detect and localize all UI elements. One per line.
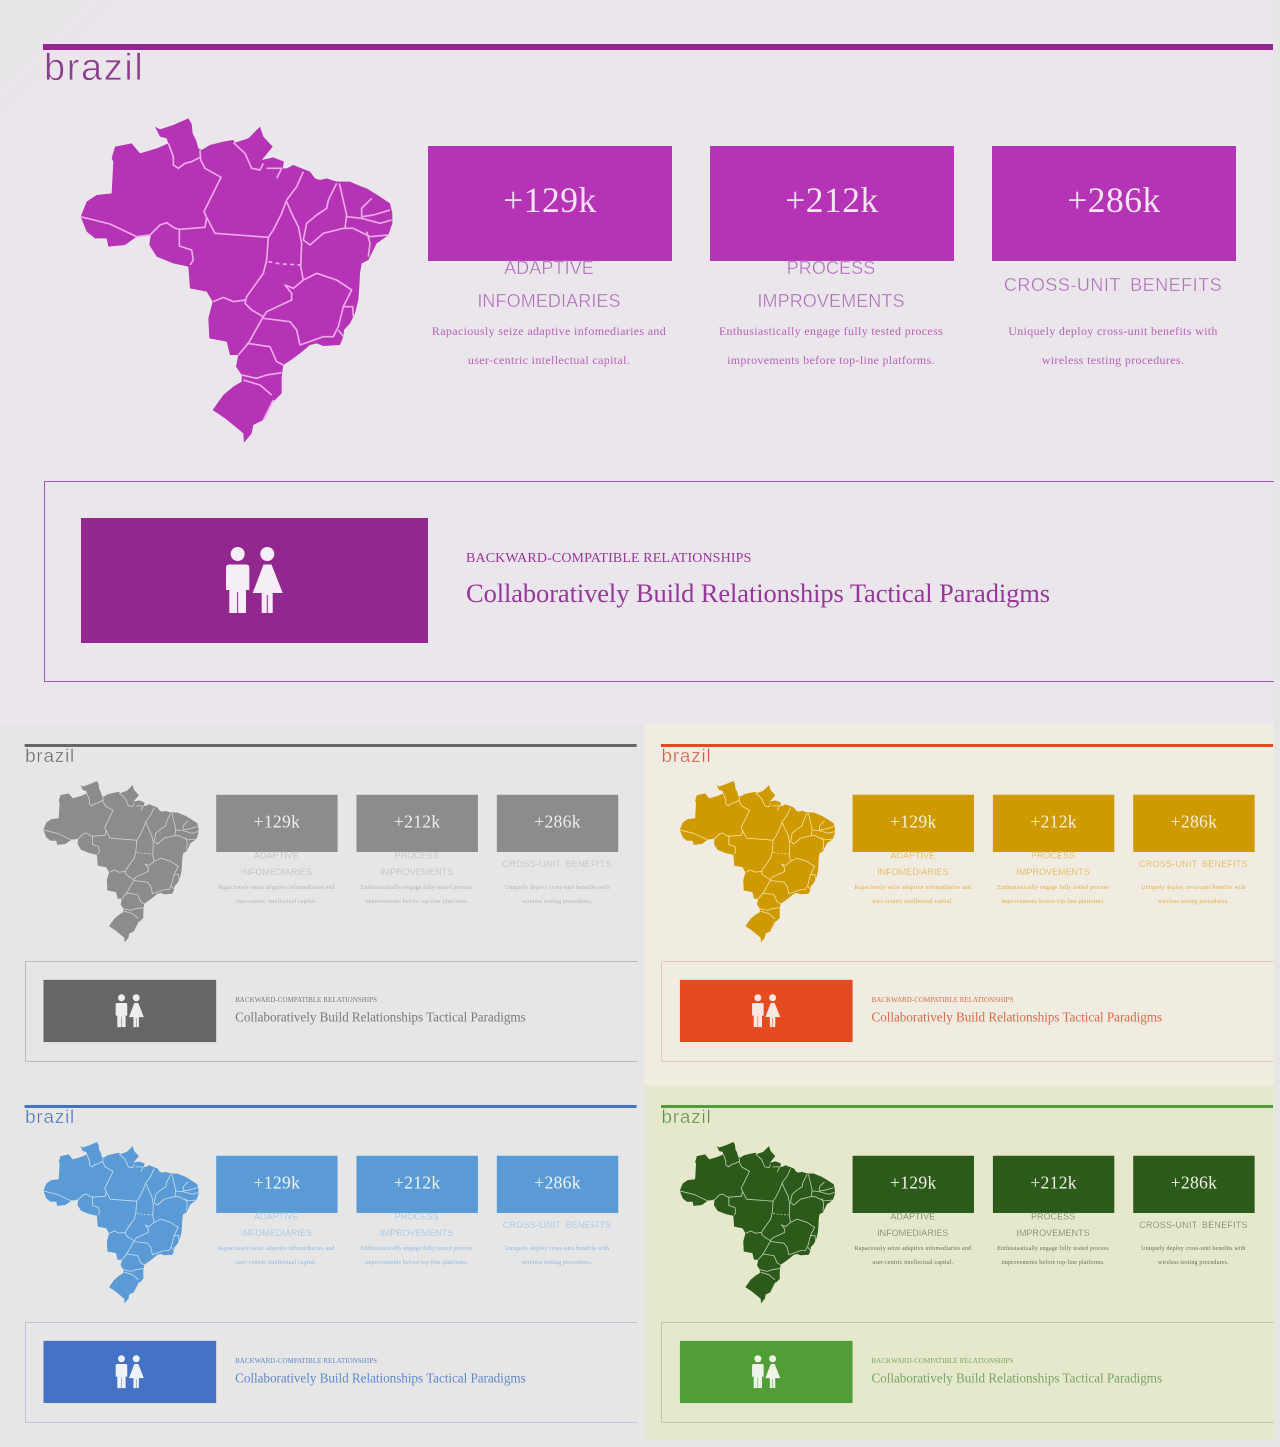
callout headline: Collaboratively Build Relationships Tactical Paradigms	[871, 1371, 1162, 1386]
stat box 2: +212k	[785, 180, 879, 220]
callout frame	[661, 961, 1274, 1061]
panel: orange slide	[661, 744, 1274, 1062]
caption 1: user-centric intellectual capital.	[236, 1259, 317, 1266]
stat box 1: +129k	[254, 1173, 300, 1193]
caption 3: Uniquely deploy cross-unit benefits with	[505, 883, 609, 890]
caption 3: Uniquely deploy cross-unit benefits with	[1141, 883, 1246, 890]
caption 2: PROCESS	[395, 1211, 439, 1221]
icon: man and woman	[752, 994, 780, 1028]
panel: grey slide	[24, 744, 638, 1062]
header bar	[43, 44, 1273, 50]
caption 1: INFOMEDIARIES	[241, 867, 312, 877]
caption 2	[997, 850, 1109, 905]
stat box 1: +129k	[890, 812, 937, 832]
stat box 3	[992, 146, 1236, 261]
stat box 2: +212k	[1030, 1173, 1077, 1193]
callout kicker: BACKWARD-COMPATIBLE RELATIONSHIPS	[871, 1357, 1014, 1365]
stat box 1	[216, 1156, 338, 1213]
caption 2: Enthusiastically engage fully tested process	[997, 1244, 1109, 1251]
map of Brazil	[680, 1142, 835, 1304]
callout colour band	[680, 1341, 853, 1403]
background: main slide	[0, 0, 1274, 725]
background: orange slide	[644, 724, 1274, 1086]
stat box 2: +212k	[394, 1173, 440, 1193]
stat box 3: +286k	[534, 812, 581, 832]
caption 2: Enthusiastically engage fully tested process	[997, 883, 1109, 890]
caption 1: ADAPTIVE	[504, 258, 594, 278]
callout colour band	[44, 980, 216, 1042]
title: brazil	[25, 1106, 75, 1127]
panel: blue slide	[24, 1105, 638, 1422]
stat box 1	[428, 146, 672, 261]
caption 1	[218, 850, 335, 905]
map of Brazil	[43, 1142, 198, 1304]
caption 2: improvements before top-line platforms.	[365, 898, 468, 905]
caption 2: improvements before top-line platforms.	[1001, 1259, 1105, 1266]
caption 2: IMPROVEMENTS	[1016, 867, 1090, 877]
caption 2: improvements before top-line platforms.	[365, 1259, 468, 1266]
stat box 3	[1133, 795, 1255, 852]
caption 3	[503, 1220, 611, 1266]
caption 3: CROSS-UNIT BENEFITS	[503, 859, 611, 869]
stat box 2	[356, 1156, 478, 1213]
caption 3	[1004, 274, 1222, 367]
caption 3: wireless testing procedures.	[522, 898, 592, 905]
stat box 2	[993, 1156, 1114, 1213]
stat box 2	[993, 795, 1114, 852]
caption 2	[719, 258, 943, 367]
caption 1: user-centric intellectual capital.	[468, 353, 630, 367]
caption 3: Uniquely deploy cross-unit benefits with	[1141, 1244, 1246, 1251]
stat box 1: +129k	[890, 1173, 937, 1193]
title: brazil	[25, 745, 75, 766]
stat box 3: +286k	[1067, 180, 1161, 220]
caption 3: Uniquely deploy cross-unit benefits with	[1008, 324, 1218, 338]
caption 3: wireless testing procedures.	[522, 1259, 592, 1266]
panel: green slide	[661, 1105, 1274, 1422]
caption 3: wireless testing procedures.	[1158, 898, 1229, 905]
caption 2: PROCESS	[1031, 850, 1075, 860]
stat box 2: +212k	[394, 812, 440, 832]
icon: man and woman	[116, 994, 144, 1028]
callout frame	[25, 961, 637, 1061]
caption 1: Rapaciously seize adaptive infomediaries and	[218, 883, 335, 890]
stat box 3: +286k	[1171, 1173, 1217, 1193]
caption 1	[218, 1211, 335, 1266]
caption 3	[1139, 859, 1248, 905]
caption 2: IMPROVEMENTS	[1016, 1228, 1090, 1238]
caption 2: Enthusiastically engage fully tested process	[719, 324, 943, 338]
stat box 2	[710, 146, 954, 261]
caption 1: user-centric intellectual capital.	[236, 898, 317, 905]
caption 2	[361, 850, 472, 905]
caption 1: Rapaciously seize adaptive infomediaries and	[855, 1244, 971, 1251]
stat box 1: +129k	[254, 812, 300, 832]
caption 1: ADAPTIVE	[254, 850, 299, 860]
caption 2: IMPROVEMENTS	[757, 291, 905, 311]
caption 3: wireless testing procedures.	[1158, 1259, 1229, 1266]
map of Brazil	[43, 781, 198, 942]
stat box 2: +212k	[1030, 812, 1077, 832]
header bar	[661, 1105, 1273, 1108]
caption 1: user-centric intellectual capital.	[872, 1259, 953, 1266]
caption 2: Enthusiastically engage fully tested process	[361, 883, 472, 890]
callout kicker: BACKWARD-COMPATIBLE RELATIONSHIPS	[871, 996, 1014, 1004]
caption 3: CROSS-UNIT BENEFITS	[503, 1220, 611, 1230]
caption 1: INFOMEDIARIES	[241, 1228, 312, 1238]
caption 1	[854, 850, 971, 905]
caption 3: Uniquely deploy cross-unit benefits with	[505, 1244, 609, 1251]
stat box 3: +286k	[1171, 812, 1217, 832]
stat box 2	[356, 795, 478, 852]
stat box 1	[216, 795, 338, 852]
callout headline: Collaboratively Build Relationships Tactical Paradigms	[235, 1010, 526, 1025]
title: brazil	[661, 1106, 711, 1127]
stat box 3: +286k	[534, 1173, 581, 1193]
caption 2	[361, 1211, 472, 1266]
caption 1: Rapaciously seize adaptive infomediaries and	[855, 883, 971, 890]
caption 3: CROSS-UNIT BENEFITS	[1139, 1220, 1248, 1230]
icon: man and woman	[116, 1355, 144, 1388]
stat box 3	[497, 1156, 618, 1213]
caption 1: ADAPTIVE	[890, 1211, 935, 1221]
header bar	[25, 1105, 637, 1108]
caption 1: ADAPTIVE	[254, 1211, 299, 1221]
stat box 1	[853, 1156, 974, 1213]
caption 2: PROCESS	[787, 258, 875, 278]
caption 3	[1139, 1220, 1248, 1266]
caption 2: improvements before top-line platforms.	[1001, 898, 1105, 905]
callout headline: Collaboratively Build Relationships Tactical Paradigms	[466, 578, 1050, 608]
icon: man and woman	[226, 547, 283, 613]
caption 1: INFOMEDIARIES	[877, 867, 948, 877]
caption 3: CROSS-UNIT BENEFITS	[1139, 859, 1248, 869]
callout frame	[25, 1322, 637, 1422]
callout colour band	[81, 518, 428, 643]
callout headline: Collaboratively Build Relationships Tactical Paradigms	[235, 1371, 526, 1386]
stat box 3	[497, 795, 618, 852]
caption 1: Rapaciously seize adaptive infomediaries and	[218, 1244, 335, 1251]
caption 2	[997, 1211, 1109, 1266]
caption 2: PROCESS	[1031, 1211, 1075, 1221]
map of Brazil	[680, 781, 835, 942]
callout kicker: BACKWARD-COMPATIBLE RELATIONSHIPS	[235, 996, 377, 1004]
caption 2: PROCESS	[395, 850, 439, 860]
caption 1: INFOMEDIARIES	[477, 291, 621, 311]
header bar	[661, 744, 1273, 747]
callout frame	[661, 1322, 1274, 1422]
background: green slide	[645, 1086, 1274, 1440]
caption 3	[503, 859, 611, 905]
stat box 3	[1133, 1156, 1255, 1213]
caption 3: CROSS-UNIT BENEFITS	[1004, 274, 1222, 294]
callout headline: Collaboratively Build Relationships Tactical Paradigms	[871, 1010, 1162, 1025]
callout colour band	[44, 1341, 216, 1403]
caption 2: Enthusiastically engage fully tested process	[361, 1244, 472, 1251]
caption 3: wireless testing procedures.	[1042, 353, 1184, 367]
callout frame	[44, 481, 1274, 682]
panel: purple main slide	[43, 44, 1274, 682]
caption 1: Rapaciously seize adaptive infomediaries and	[432, 324, 666, 338]
map of Brazil	[80, 118, 392, 442]
caption 2: improvements before top-line platforms.	[727, 353, 935, 367]
callout colour band	[680, 980, 853, 1042]
callout kicker: BACKWARD-COMPATIBLE RELATIONSHIPS	[466, 551, 751, 566]
caption 1: INFOMEDIARIES	[877, 1228, 948, 1238]
stat box 1	[853, 795, 974, 852]
caption 1	[432, 258, 666, 367]
title: brazil	[661, 745, 711, 766]
caption 1: ADAPTIVE	[890, 850, 935, 860]
header bar	[25, 744, 637, 747]
stat box 1: +129k	[503, 180, 597, 220]
caption 2: IMPROVEMENTS	[380, 867, 453, 877]
caption 2: IMPROVEMENTS	[380, 1228, 453, 1238]
caption 1: user-centric intellectual capital.	[872, 898, 953, 905]
caption 1	[854, 1211, 971, 1266]
icon: man and woman	[752, 1355, 780, 1388]
title: brazil	[44, 47, 144, 89]
callout kicker: BACKWARD-COMPATIBLE RELATIONSHIPS	[235, 1357, 377, 1365]
